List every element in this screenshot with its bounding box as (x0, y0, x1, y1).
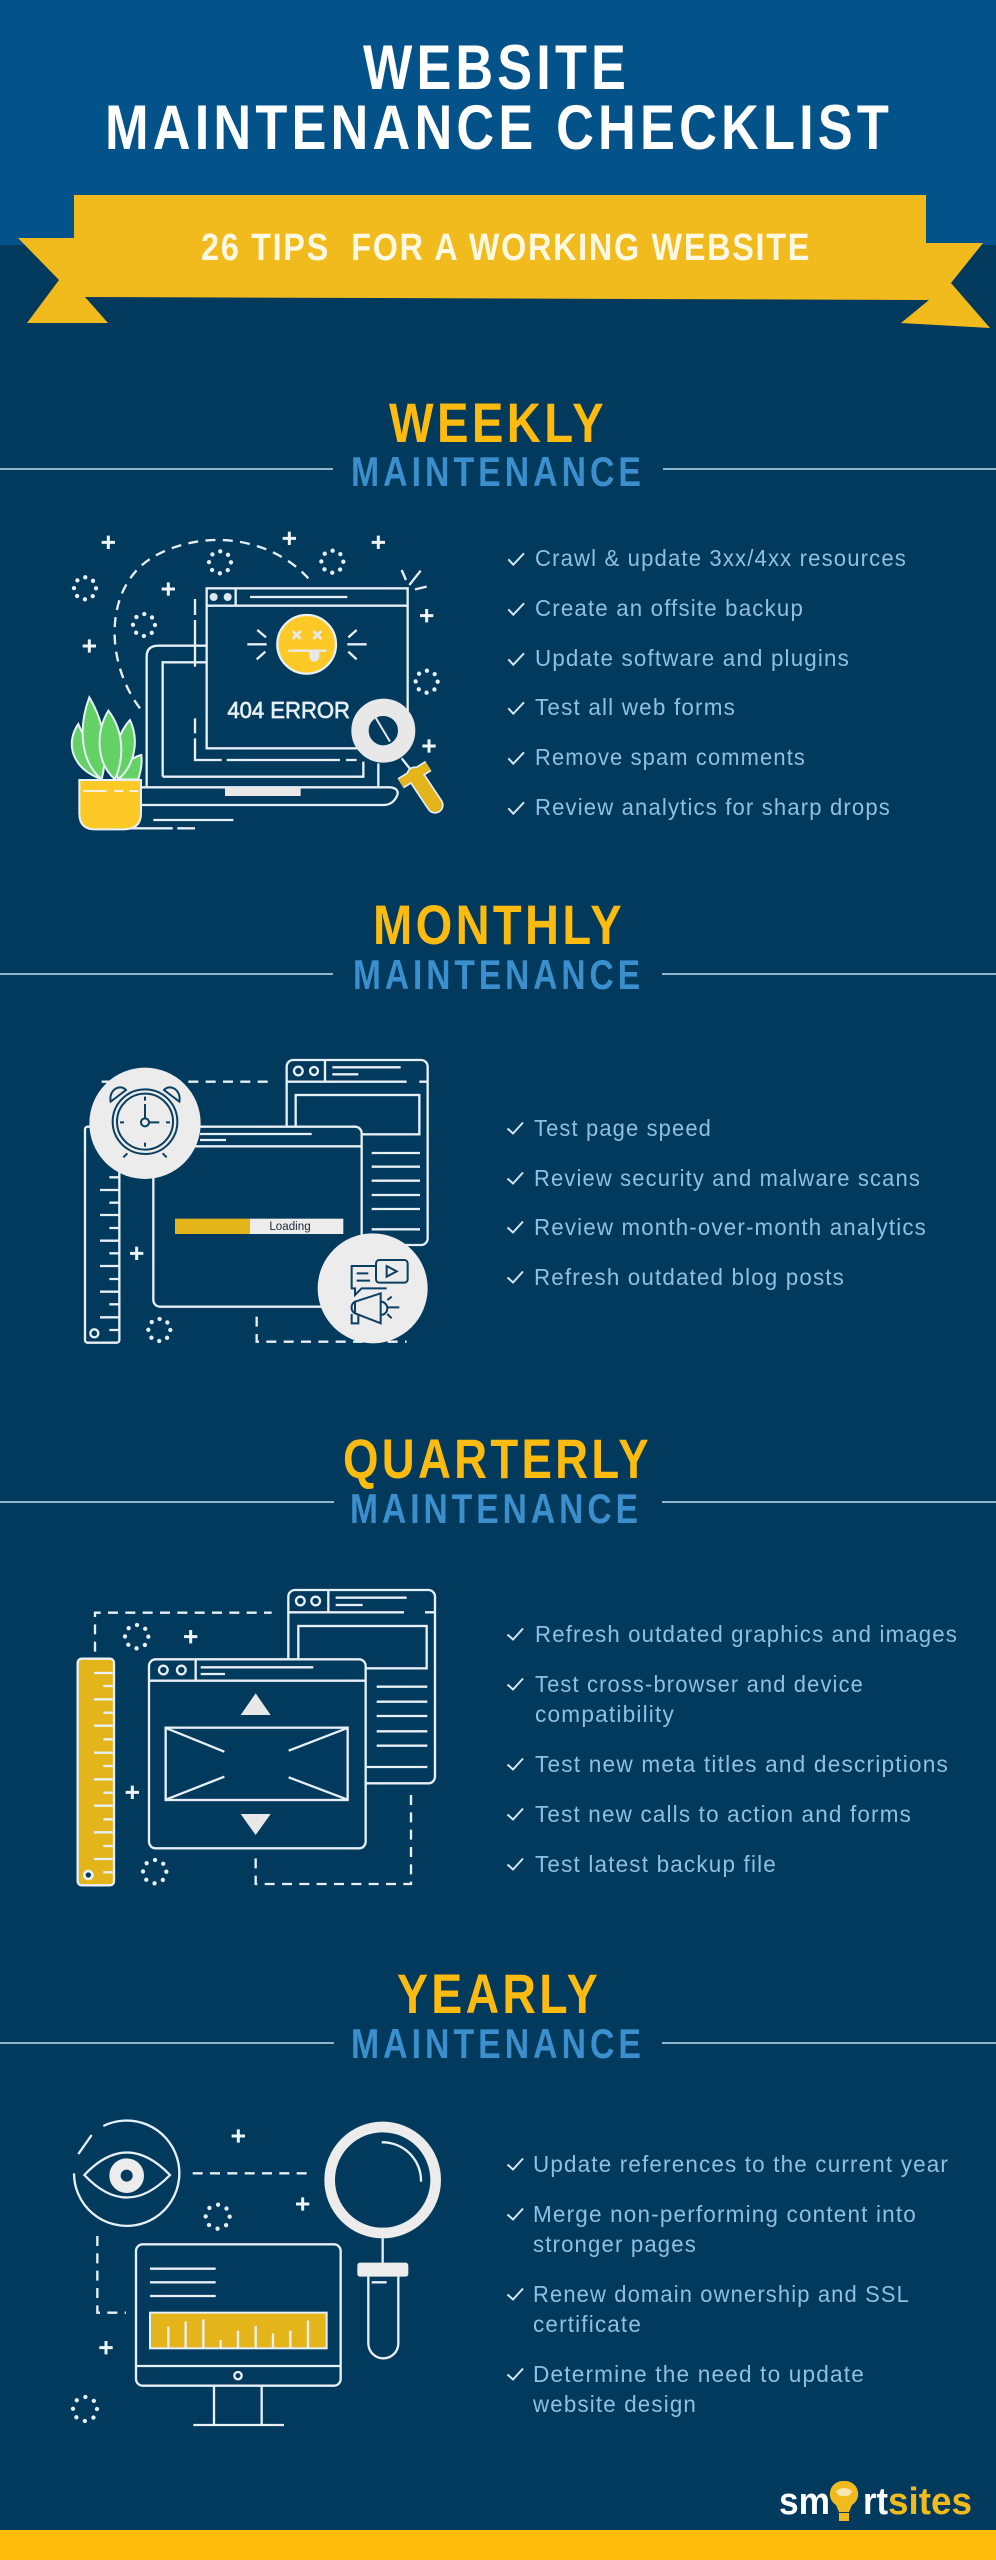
section heading: quarterly: QUARTERLY (343, 1427, 652, 1490)
item (508, 2281, 910, 2337)
item: Create an offsite backup (535, 595, 804, 621)
item: Crawl & update 3xx/4xx resources (535, 545, 907, 571)
section heading: weekly (0, 391, 996, 495)
illustration: eye, monitor and magnifier (73, 2121, 436, 2425)
icon: eye (74, 2121, 179, 2226)
text: 404 error: 404 ERROR (227, 697, 350, 723)
icon: dizzy face (247, 615, 367, 674)
logo: smartsites (779, 2481, 972, 2523)
ruler (85, 1127, 119, 1343)
section heading: monthly (0, 893, 996, 998)
logo: smartsites: rt (863, 2481, 888, 2523)
item: Test page speed (534, 1115, 712, 1141)
item: Refresh outdated blog posts (534, 1264, 845, 1290)
item: website design (532, 2391, 697, 2417)
item: certificate (533, 2311, 642, 2337)
section heading: monthly: MONTHLY (373, 893, 625, 956)
icon: potted plant (72, 697, 142, 829)
item: Renew domain ownership and SSL (533, 2281, 910, 2307)
loading bar: Loading (269, 1219, 311, 1233)
section heading: quarterly: MAINTENANCE (350, 1485, 642, 1532)
background: blue header band (0, 0, 996, 245)
checklist: monthly (508, 1115, 927, 1290)
item (508, 1671, 864, 1727)
yellow ruler (78, 1659, 114, 1885)
item: Review security and malware scans (534, 1165, 921, 1191)
checklist: quarterly (508, 1621, 958, 1877)
item: Update software and plugins (535, 645, 850, 671)
icon: magnifying glass (330, 2127, 436, 2358)
section heading: weekly: WEEKLY (389, 391, 607, 454)
item: Merge non-performing content into (533, 2201, 917, 2227)
ribbon text: 26 TIPS FOR A WORKING WEBSITE (201, 227, 811, 269)
section heading: monthly: MAINTENANCE (353, 951, 644, 998)
item (508, 2201, 917, 2257)
icon: megaphone and media (318, 1233, 428, 1343)
item: Test new calls to action and forms (535, 1801, 912, 1827)
item: stronger pages (533, 2231, 697, 2257)
item (508, 2361, 865, 2417)
icon: alarm clock (89, 1068, 201, 1179)
title (105, 33, 893, 163)
section heading: weekly: MAINTENANCE (351, 448, 645, 495)
item: Remove spam comments (535, 744, 806, 770)
checklist: yearly (508, 2151, 949, 2417)
section heading: yearly: MAINTENANCE (351, 2020, 645, 2067)
item: Test latest backup file (535, 1851, 777, 1877)
section heading: yearly: YEARLY (397, 1962, 601, 2025)
item: compatibility (535, 1701, 675, 1727)
item: Update references to the current year (533, 2151, 949, 2177)
item: Determine the need to update (533, 2361, 865, 2387)
title: WEBSITE (363, 33, 630, 103)
icon: light bulb (830, 2481, 858, 2521)
illustration: 404 error laptop (72, 532, 438, 829)
item: Test all web forms (535, 694, 736, 720)
illustration: resize windows (78, 1590, 435, 1885)
icon: monitor (136, 2244, 341, 2425)
item: Test new meta titles and descriptions (535, 1751, 949, 1777)
checklist: weekly (508, 545, 907, 820)
section heading: quarterly (0, 1427, 996, 1532)
item: Review month-over-month analytics (534, 1214, 927, 1240)
item: Refresh outdated graphics and images (535, 1621, 958, 1647)
item: Review analytics for sharp drops (535, 794, 891, 820)
item: Test cross-browser and device (535, 1671, 864, 1697)
section heading: yearly (0, 1962, 996, 2067)
footer bar (0, 2530, 996, 2560)
logo: smartsites: sites (888, 2481, 972, 2523)
loading bar (175, 1219, 343, 1234)
icon: magnifier (360, 707, 435, 805)
logo: smartsites: sm (779, 2481, 830, 2523)
illustration: loading windows (85, 1060, 428, 1343)
ribbon banner (18, 195, 990, 328)
